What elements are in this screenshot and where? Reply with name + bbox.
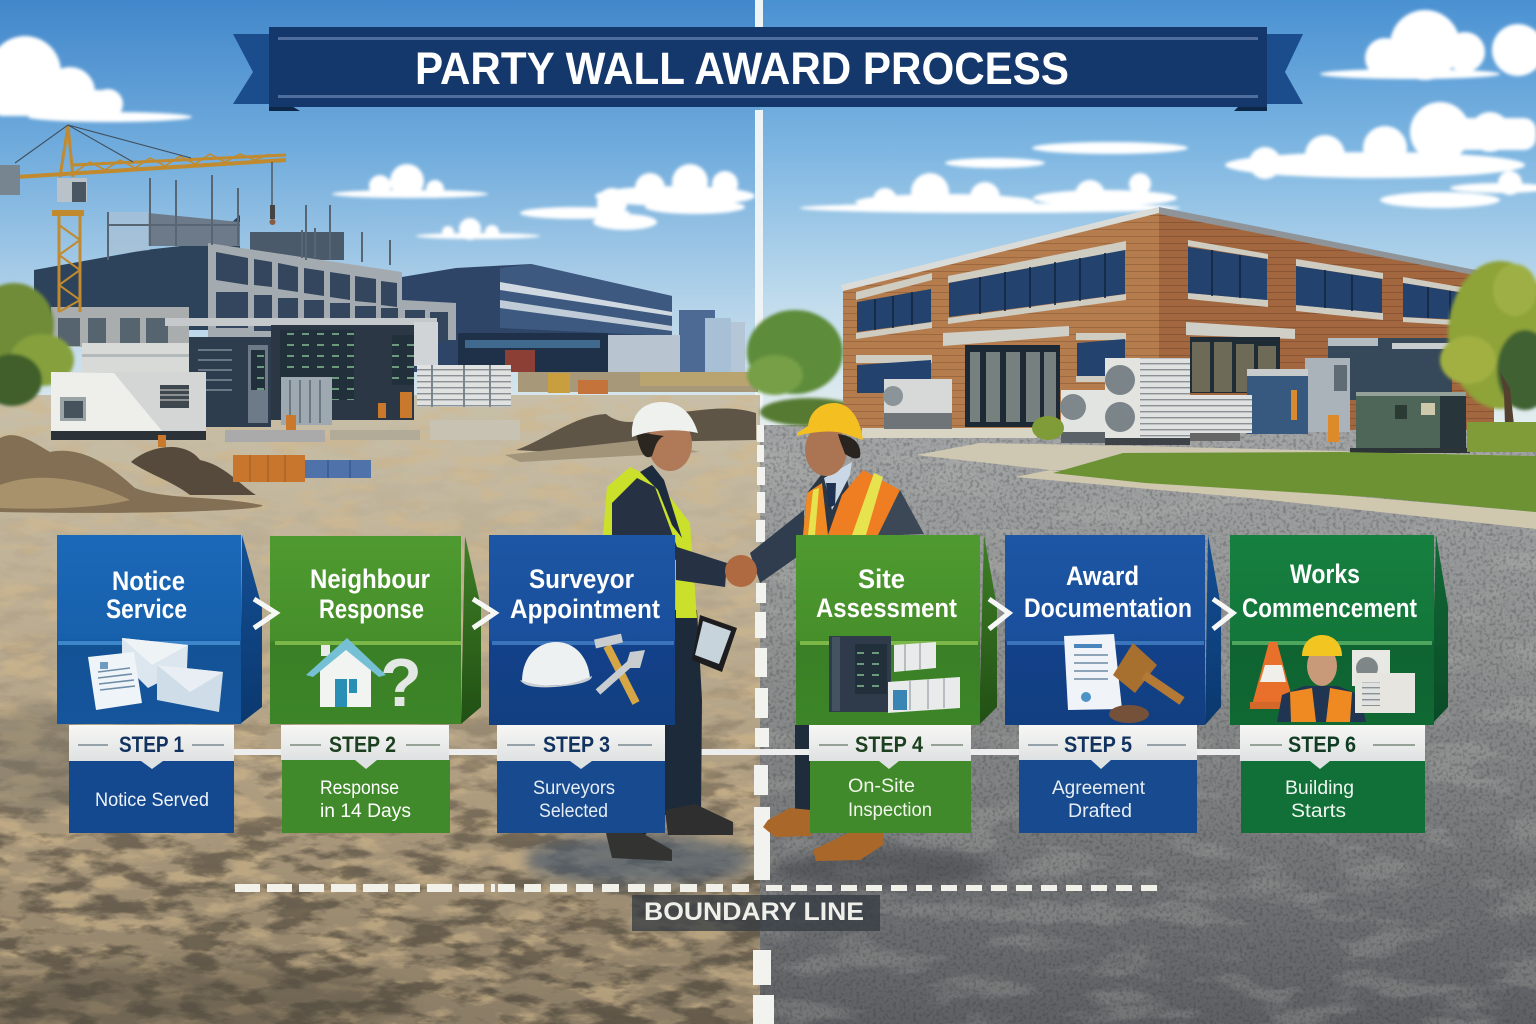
step label: STEP 5 xyxy=(1064,732,1132,757)
boots xyxy=(763,808,811,837)
step 1 card: Notice Served xyxy=(95,790,209,811)
step label: STEP 6 xyxy=(1288,732,1356,757)
icon: notice and envelopes xyxy=(88,638,223,712)
description xyxy=(497,761,665,833)
boots xyxy=(665,804,733,835)
side xyxy=(461,536,481,724)
step 5 card: Drafted xyxy=(1068,801,1132,822)
front panel xyxy=(1230,535,1434,725)
left tree xyxy=(0,283,74,406)
right ground xyxy=(760,425,1536,1024)
right canopy and glazing xyxy=(1186,322,1295,393)
step 4 card: Inspection xyxy=(848,800,932,821)
heading: Appointment xyxy=(510,594,660,624)
connector line xyxy=(234,749,1244,755)
step 2 card xyxy=(270,536,481,833)
data-centre plant xyxy=(51,318,520,447)
label bar xyxy=(281,725,449,760)
banner body xyxy=(269,27,1267,107)
label bar xyxy=(1240,725,1425,761)
description xyxy=(810,761,971,833)
banner tails xyxy=(233,34,272,104)
boundary line label xyxy=(632,895,880,931)
left tree and shrubs xyxy=(747,310,860,426)
arrow 5 xyxy=(1213,599,1233,629)
heading: Service xyxy=(106,594,187,624)
icon: hard hat and tools xyxy=(520,638,645,703)
background: sky left xyxy=(0,0,760,440)
step 3 card: Surveyors xyxy=(533,778,615,799)
arrow 1 xyxy=(254,599,276,628)
front panel xyxy=(489,535,675,725)
distant blue building xyxy=(402,264,680,373)
right tree xyxy=(1440,261,1536,410)
icon: house and question mark: ? xyxy=(380,645,422,721)
step 6 card xyxy=(1230,535,1448,833)
arrow 4 xyxy=(989,599,1009,629)
step label: STEP 2 xyxy=(329,732,396,757)
windows xyxy=(856,240,1472,393)
front panel xyxy=(796,535,980,725)
icon: document and gavel xyxy=(1064,634,1182,723)
step label: STEP 3 xyxy=(543,732,610,757)
shirt and tie xyxy=(824,462,852,510)
leg xyxy=(795,725,811,815)
clouds right xyxy=(800,10,1536,213)
brick building xyxy=(841,207,1496,430)
label bar xyxy=(69,725,234,761)
step 2 card: in 14 Days xyxy=(320,801,411,822)
background: sky right xyxy=(760,0,1536,440)
step 5 card: Agreement xyxy=(1052,778,1146,799)
head xyxy=(648,417,692,471)
step 5 card xyxy=(1005,535,1221,833)
orange vest xyxy=(803,483,828,535)
description xyxy=(69,761,234,833)
label bar xyxy=(497,725,665,761)
heading: Response xyxy=(319,594,424,624)
paved paths xyxy=(862,428,1536,529)
heading: Works xyxy=(1290,559,1360,589)
building under construction xyxy=(34,175,456,347)
entrance xyxy=(943,326,1069,427)
front panel xyxy=(57,535,241,724)
step 3 card xyxy=(489,535,675,833)
label bar xyxy=(809,725,971,761)
shrubs xyxy=(1032,416,1536,452)
step label: STEP 4 xyxy=(855,732,924,757)
centre dashed boundary line xyxy=(753,425,774,1024)
side xyxy=(1205,535,1221,725)
jacket xyxy=(803,470,860,536)
heading: Notice xyxy=(112,566,185,596)
heading: Surveyor xyxy=(529,564,634,594)
heading: Assessment xyxy=(816,593,957,623)
heading: Commencement xyxy=(1242,593,1417,623)
description xyxy=(282,760,450,833)
icon: cone, worker and air conditioners xyxy=(1250,635,1415,722)
step 1 card xyxy=(57,535,262,833)
tower crane xyxy=(0,125,286,312)
heading: Neighbour xyxy=(310,564,430,594)
hi-vis vest xyxy=(603,467,697,618)
icon: house and question mark xyxy=(306,638,422,721)
title banner xyxy=(233,27,1303,111)
heading: Site xyxy=(858,564,905,594)
legs xyxy=(640,610,702,840)
left ground xyxy=(0,395,760,1024)
worker: right surveyor xyxy=(750,403,924,861)
stacked materials xyxy=(233,455,371,482)
step label: STEP 1 xyxy=(119,732,184,757)
clouds left xyxy=(0,36,755,240)
side xyxy=(1431,535,1448,725)
label bar xyxy=(1019,725,1197,760)
far shoulder xyxy=(876,487,924,536)
arrow 2 xyxy=(473,599,495,628)
step 3 card: Selected xyxy=(539,801,608,822)
lawn xyxy=(1053,452,1536,512)
description xyxy=(1019,760,1197,833)
step 6 card: Building xyxy=(1285,778,1354,799)
description xyxy=(1241,761,1425,833)
handshake xyxy=(725,555,757,587)
heading: Documentation xyxy=(1024,593,1192,623)
step 4 card xyxy=(796,535,997,833)
step 6 card: Starts xyxy=(1291,801,1346,822)
arm to handshake xyxy=(750,510,804,583)
heading: Award xyxy=(1066,561,1139,591)
plant units xyxy=(883,338,1470,453)
step 4 card: On-Site xyxy=(848,776,915,797)
icon: server rack and cooling units xyxy=(829,636,960,713)
front panel xyxy=(270,536,461,724)
side xyxy=(240,535,262,724)
head xyxy=(805,424,847,476)
side xyxy=(979,535,997,725)
materials on far road xyxy=(518,372,758,394)
jacket and arm xyxy=(612,478,727,587)
white hard hat xyxy=(632,402,698,437)
banner fold xyxy=(269,105,300,111)
step 2 card: Response xyxy=(320,778,399,799)
tree trunk xyxy=(1500,372,1514,425)
scene: left construction site xyxy=(0,125,758,513)
worker: left surveyor xyxy=(603,402,737,861)
dirt mounds xyxy=(0,408,756,513)
front panel xyxy=(1005,535,1205,725)
centre boundary line in sky xyxy=(755,0,763,410)
boundary line label: BOUNDARY LINE xyxy=(644,898,864,926)
title: PARTY WALL AWARD PROCESS xyxy=(415,43,1069,94)
yellow hard hat xyxy=(797,403,863,440)
horizontal dashed boundary line xyxy=(235,884,1157,892)
tablet xyxy=(692,615,737,672)
scene: right finished building xyxy=(747,207,1536,529)
distant towers xyxy=(679,310,745,372)
